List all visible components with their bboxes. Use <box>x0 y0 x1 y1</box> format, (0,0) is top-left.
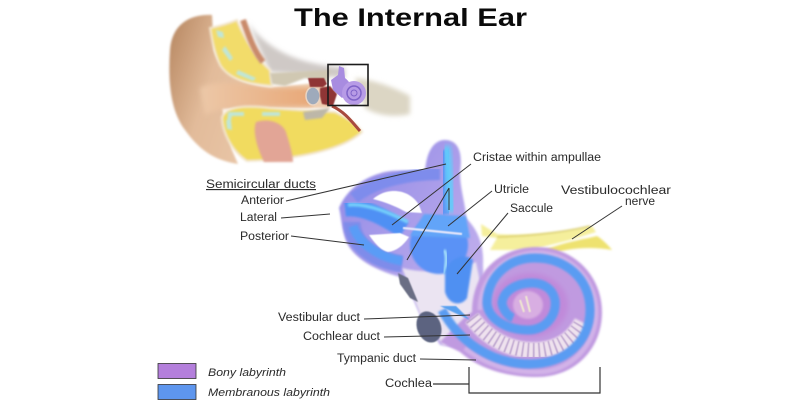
lower vestibule pale area <box>402 262 490 346</box>
title: The Internal Ear <box>294 4 527 32</box>
locator box <box>328 64 368 106</box>
saccule <box>445 256 473 303</box>
inner ear illustration <box>339 140 612 377</box>
legend: membranous labyrinth: Membranous labyrinth <box>208 387 330 399</box>
lower yellow tissue <box>222 106 362 161</box>
saccule label: Saccule <box>510 203 553 215</box>
label posterior <box>240 231 364 245</box>
ear skin <box>169 15 330 164</box>
vestibulocochlear nerve label: nerve <box>625 196 655 208</box>
anterior ampulla and crus <box>444 150 448 214</box>
label anterior <box>241 164 446 207</box>
legend: membranous labyrinth <box>158 384 330 400</box>
cochlear duct label: Cochlear duct <box>303 331 381 343</box>
utricle label <box>448 184 529 226</box>
lateral duct <box>345 208 404 230</box>
hole inside posterior loop <box>369 233 409 252</box>
artery <box>332 106 360 131</box>
round window <box>412 308 446 346</box>
cristae label: Cristae within ampullae <box>473 152 601 164</box>
cochlea label and bracket: Cochlea <box>385 378 433 390</box>
vestibulocochlear nerve label <box>561 185 671 239</box>
vestibular duct label <box>278 312 470 324</box>
spiral center <box>513 291 543 319</box>
saccule tail <box>440 306 470 320</box>
utricle and vestibule <box>410 216 468 274</box>
oval window <box>398 273 418 302</box>
semicircular ducts labels <box>206 164 446 245</box>
outer rim highlight <box>465 253 596 372</box>
label anterior: Anterior <box>241 195 284 207</box>
legend <box>158 364 330 400</box>
middle ear red bones <box>308 78 337 106</box>
cristae label <box>392 152 601 260</box>
legend: bony labyrinth <box>158 364 286 379</box>
cartilage patches <box>216 30 256 81</box>
bone <box>270 70 330 86</box>
label lateral: Lateral <box>240 212 277 224</box>
cochlea label and bracket <box>385 367 600 393</box>
vestibulocochlear nerve label: Vestibulocochlear <box>561 185 671 197</box>
outer ear illustration <box>169 15 410 164</box>
vestibulocochlear nerve <box>481 224 612 256</box>
anterior duct <box>354 174 440 198</box>
saccule label <box>457 203 553 274</box>
inner purple <box>492 273 568 337</box>
pink muscle <box>255 120 293 162</box>
cochlea spiral <box>440 247 602 377</box>
vestibule highlights <box>403 228 462 234</box>
red vessel upper <box>243 20 263 62</box>
utricle label: Utricle <box>494 184 529 196</box>
posterior duct <box>352 222 402 264</box>
ribs <box>472 318 582 350</box>
label posterior: Posterior <box>240 231 289 243</box>
eardrum <box>306 87 320 105</box>
tympanic duct label <box>337 353 476 365</box>
membranous duct <box>442 258 590 364</box>
cartilage lower <box>226 112 280 130</box>
hole inside anterior loop <box>373 191 422 213</box>
vestibular duct label: Vestibular duct <box>278 312 361 324</box>
labyrinth silhouette <box>339 140 486 350</box>
label lateral <box>240 212 330 224</box>
upper yellow tissue <box>210 20 272 86</box>
heading: Semicircular ducts <box>206 179 316 191</box>
gray tissue <box>248 22 345 78</box>
mini labyrinth <box>331 66 366 105</box>
tympanic duct label: Tympanic duct <box>337 353 417 365</box>
legend: bony labyrinth: Bony labyrinth <box>208 367 286 379</box>
ear canal <box>200 83 312 115</box>
